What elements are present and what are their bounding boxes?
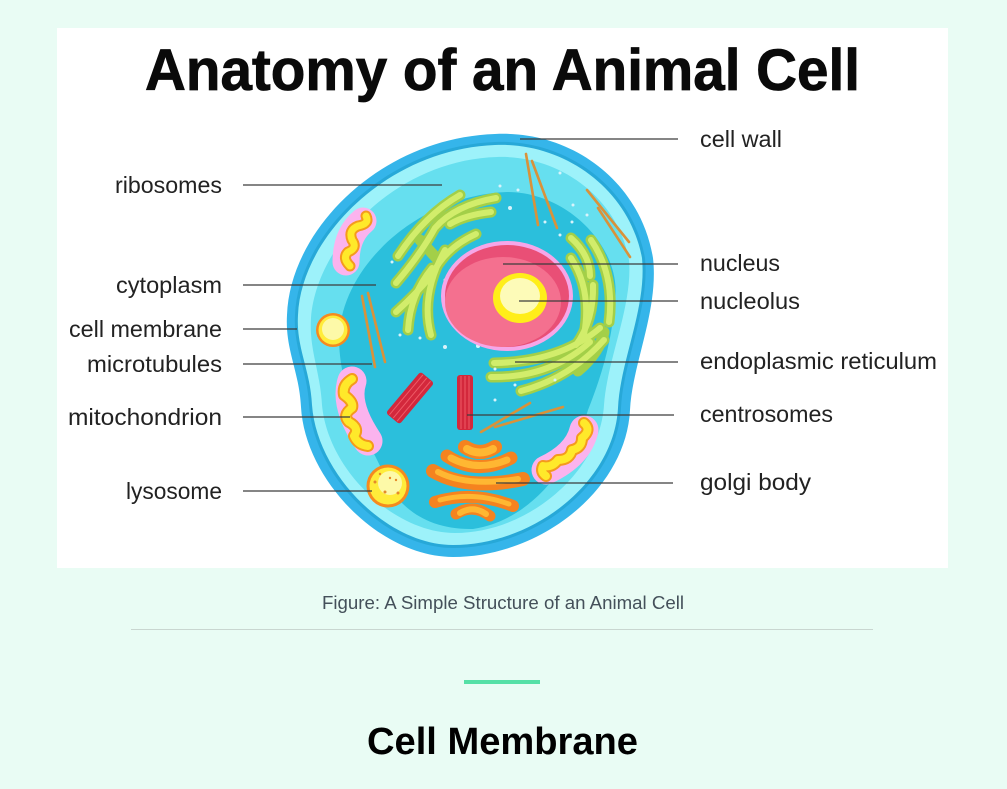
label: cell membrane: cell membrane	[69, 316, 222, 342]
centrosome upright	[457, 375, 473, 430]
label leader lines	[243, 139, 678, 491]
cytoplasm inner	[339, 192, 616, 529]
label: cell wall: cell wall	[700, 126, 782, 152]
label: cytoplasm: cytoplasm	[116, 272, 222, 298]
label: endoplasmic reticulum: endoplasmic reticulum	[700, 348, 937, 374]
mitochondrion left	[344, 379, 368, 446]
microtubules	[362, 154, 630, 432]
golgi body	[433, 447, 523, 516]
endoplasmic reticulum right	[491, 238, 610, 391]
mitochondrion top left	[345, 216, 367, 266]
label: mitochondrion: mitochondrion	[68, 404, 222, 430]
cell diagram	[287, 134, 654, 557]
label: lysosome: lysosome	[126, 478, 222, 504]
endoplasmic reticulum left	[396, 195, 610, 391]
centrosome rotated	[386, 372, 434, 424]
label: microtubules: microtubules	[87, 351, 222, 377]
label: ribosomes: ribosomes	[115, 172, 222, 198]
label: nucleus: nucleus	[700, 250, 780, 276]
ribosome dots	[390, 172, 588, 402]
caption: Figure: A Simple Structure of an Animal Cell	[322, 593, 684, 613]
cell wall	[287, 134, 654, 557]
title: Anatomy of an Animal Cell	[145, 38, 860, 103]
cytoplasm outer	[298, 145, 643, 545]
nucleus	[441, 241, 573, 351]
lysosome top	[316, 313, 350, 347]
label: nucleolus: nucleolus	[700, 288, 800, 314]
label: centrosomes: centrosomes	[700, 401, 833, 427]
label: golgi body: golgi body	[700, 469, 812, 495]
lysosome bottom	[366, 464, 410, 508]
mitochondrion right	[542, 423, 588, 476]
figure panel	[57, 28, 948, 568]
heading: Cell Membrane	[367, 721, 638, 763]
accent bar	[464, 680, 540, 684]
nucleolus	[493, 273, 547, 323]
